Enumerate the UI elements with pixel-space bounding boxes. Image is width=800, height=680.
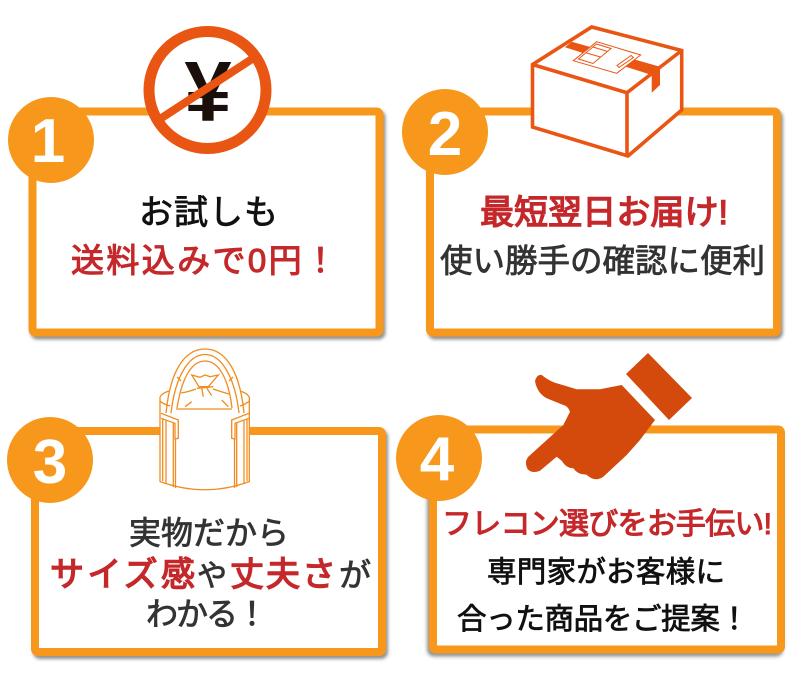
number badge 3 bbox=[7, 417, 93, 503]
panel 1 frame bbox=[32, 112, 380, 332]
panel 4 text: 合った商品をご提案！ bbox=[457, 603, 749, 636]
panel 3 frame bbox=[35, 431, 382, 652]
panel 3 text bbox=[50, 515, 371, 632]
panel 3 text: わかる！ bbox=[146, 596, 268, 632]
number badge 4 bbox=[396, 415, 482, 501]
panel 3 text: サイズ感 bbox=[50, 556, 195, 594]
panel 2 text: 使い勝手の確認に便利 bbox=[440, 243, 765, 279]
panel 2 text bbox=[440, 194, 765, 279]
panel 3: see the real thing bbox=[7, 349, 382, 652]
icon: prohibited yen bbox=[149, 32, 266, 148]
panel 2 text: 最短翌日お届け! bbox=[480, 194, 728, 232]
panel 3 text: が bbox=[339, 557, 371, 593]
panel 1 text: お試しも bbox=[139, 194, 278, 232]
panel 1 text bbox=[71, 194, 337, 279]
number badge 1 bbox=[8, 97, 94, 183]
panel 3 text: や bbox=[197, 560, 227, 593]
panel 1 text: 送料込みで0円！ bbox=[71, 242, 337, 279]
panel 3 text: 丈夫さ bbox=[230, 556, 336, 594]
number badge 2 bbox=[402, 89, 488, 175]
number badge 3: 3 bbox=[33, 428, 67, 497]
panel 2: next-day delivery bbox=[402, 27, 777, 332]
number badge 4: 4 bbox=[420, 425, 455, 494]
panel 4 text: 専門家がお客様に bbox=[487, 556, 725, 589]
panel 2 frame bbox=[430, 112, 777, 332]
panel 4: expert help bbox=[396, 353, 781, 650]
panel 1: free trial bbox=[8, 32, 380, 332]
icon: bulk bag bbox=[160, 349, 249, 490]
panel 3 text: 実物だから bbox=[129, 515, 289, 551]
panel 4 frame bbox=[433, 430, 781, 650]
panel 4 text: フレコン選びをお手伝い! bbox=[442, 508, 772, 541]
panel 4 text bbox=[442, 508, 772, 636]
number badge 1: 1 bbox=[31, 107, 65, 176]
number badge 2: 2 bbox=[428, 100, 462, 169]
icon: cardboard box bbox=[532, 27, 682, 156]
icon: pointing hand bbox=[526, 353, 692, 479]
icon: prohibited yen: ¥ bbox=[184, 45, 232, 140]
